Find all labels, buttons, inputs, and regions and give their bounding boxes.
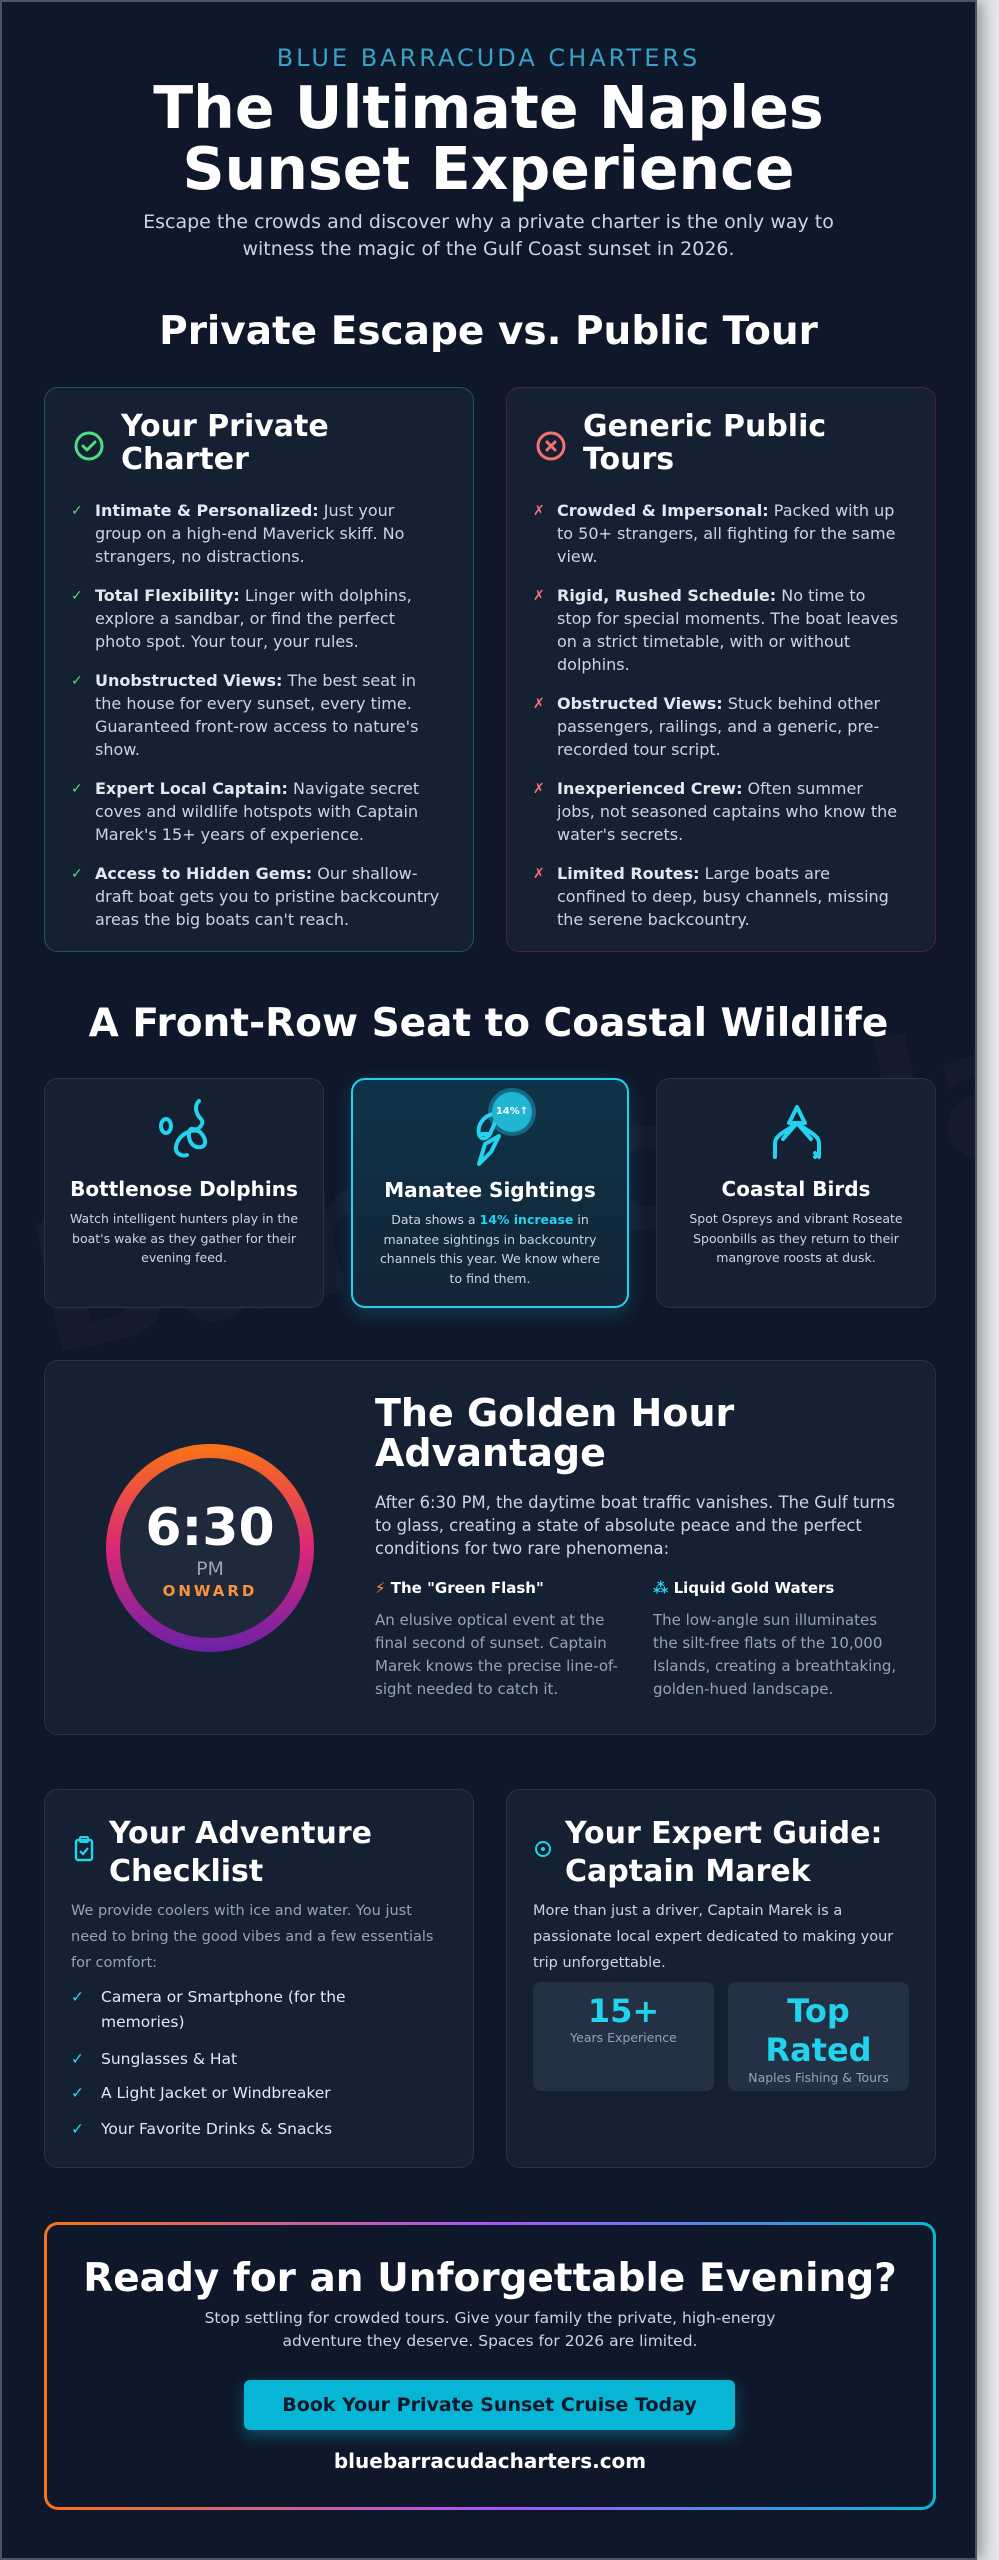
list: Your Favorite Drinks & Snacks bbox=[101, 2120, 332, 2138]
panel: checklist bbox=[44, 1789, 474, 2168]
phenomenon: liquid gold: ⁂ Liquid Gold Waters bbox=[653, 1579, 834, 1597]
heading: Your Adventure bbox=[109, 1816, 372, 1851]
list: ✓ bbox=[71, 2120, 84, 2138]
list bbox=[71, 501, 439, 929]
icon: bird bbox=[773, 1105, 822, 1160]
stat: years bbox=[533, 1982, 714, 2091]
heading: Captain Marek bbox=[565, 1854, 811, 1889]
title bbox=[153, 74, 824, 203]
button: Book Your Private Sunset Cruise Today bbox=[282, 2394, 697, 2416]
CTA text: Stop settling for crowded tours. Give your family the private, high-energy bbox=[205, 2309, 775, 2327]
heading: wildlife: A Front-Row Seat to Coastal Wildlife bbox=[89, 1001, 888, 1046]
subtitle: witness the magic of the Gulf Coast sunset in 2026. bbox=[242, 238, 735, 260]
list: Total Flexibility: Linger with dolphins, explore a sandbar, or find the perfect photo spot. Your tour, your rules. bbox=[95, 586, 412, 651]
icon: compass bbox=[535, 1841, 551, 1857]
heading bbox=[564, 1816, 883, 1889]
clock ring bbox=[106, 1444, 314, 1652]
stat: top rated bbox=[728, 1982, 909, 2091]
list: ✓ bbox=[71, 2084, 84, 2102]
list: ✓ bbox=[71, 588, 83, 604]
icon: x circle bbox=[536, 432, 566, 460]
list: Inexperienced Crew: Often summer jobs, not seasoned captains who know the water's secrets. bbox=[557, 779, 897, 844]
list: ✓ bbox=[71, 2050, 84, 2068]
stat: top rated: Top bbox=[787, 1992, 850, 2030]
card: dolphins: Watch intelligent hunters play in the boat's wake as they gather for their evening feed. bbox=[70, 1211, 298, 1265]
list: ✗ bbox=[533, 588, 545, 604]
card: dolphins bbox=[44, 1078, 324, 1308]
list: ✗ bbox=[533, 696, 545, 712]
CTA heading: Ready for an Unforgettable Evening? bbox=[83, 2256, 897, 2301]
list bbox=[533, 501, 898, 929]
heading: Advantage bbox=[375, 1431, 606, 1475]
badge: 14%: 14%↑ bbox=[496, 1106, 528, 1117]
panel: private charter bbox=[44, 387, 474, 952]
panel: public tours bbox=[506, 387, 936, 952]
heading: Generic Public bbox=[583, 409, 826, 444]
stat: top rated: Naples Fishing & Tours bbox=[748, 2070, 889, 2085]
list: Camera or Smartphone (for the memories) bbox=[101, 1988, 346, 2031]
list bbox=[71, 1988, 346, 2138]
icon: dolphin bbox=[159, 1098, 208, 1158]
list: ✓ bbox=[71, 503, 83, 519]
list: ✓ bbox=[71, 673, 83, 689]
CTA text: adventure they deserve. Spaces for 2026 are limited. bbox=[283, 2332, 697, 2350]
panel: wildlife cards bbox=[44, 1076, 936, 1322]
icon: check circle bbox=[74, 432, 104, 460]
list: Crowded & Impersonal: Packed with up to 50+ strangers, all fighting for the same view. bbox=[557, 501, 895, 566]
list: Access to Hidden Gems: Our shallow-draft boat gets you to pristine backcountry areas the big boats can't reach. bbox=[95, 864, 439, 929]
subtitle bbox=[143, 211, 834, 260]
button bbox=[244, 2380, 735, 2430]
heading: Checklist bbox=[109, 1854, 263, 1889]
card: manatee (highlighted): Manatee Sightings bbox=[384, 1178, 596, 1202]
heading: The Golden Hour bbox=[375, 1391, 734, 1435]
list: Limited Routes: Large boats are confined to deep, busy channels, missing the serene backcountry. bbox=[557, 864, 889, 929]
card: birds: Spot Ospreys and vibrant Roseate Spoonbills as they return to their mangrove roosts at dusk. bbox=[689, 1211, 903, 1265]
list: Expert Local Captain: Navigate secret coves and wildlife hotspots with Captain Marek's 15+ years of experience. bbox=[95, 779, 419, 844]
list: A Light Jacket or Windbreaker bbox=[101, 2084, 331, 2102]
intro: We provide coolers with ice and water. You just need to bring the good vibes and a few essentials for comfort: bbox=[71, 1903, 433, 1971]
intro: More than just a driver, Captain Marek is a passionate local expert dedicated to making your trip unforgettable. bbox=[533, 1903, 893, 1971]
title: Sunset Experience bbox=[182, 135, 795, 203]
stat: top rated: Rated bbox=[765, 2031, 872, 2069]
card: dolphins: Bottlenose Dolphins bbox=[70, 1177, 298, 1201]
subtitle: Escape the crowds and discover why a private charter is the only way to bbox=[143, 211, 834, 233]
list: ✓ bbox=[71, 866, 83, 882]
icon: manatee bbox=[476, 1112, 502, 1166]
title: The Ultimate Naples bbox=[153, 74, 824, 142]
list: Sunglasses & Hat bbox=[101, 2050, 237, 2068]
clock ring: 6:30 bbox=[145, 1498, 275, 1558]
brand label: BLUE BARRACUDA CHARTERS bbox=[277, 44, 700, 72]
icon: clipboard bbox=[74, 1836, 94, 1862]
card: birds: Coastal Birds bbox=[722, 1177, 870, 1201]
card: birds bbox=[656, 1078, 936, 1308]
phenomenon: liquid gold: The low-angle sun illuminates the silt-free flats of the 10,000 Islands, creating a breathtaking, golden-hued landscape. bbox=[653, 1611, 896, 1698]
list: ✗ bbox=[533, 866, 545, 882]
url: bluebarracudacharters.com bbox=[334, 2449, 646, 2473]
heading bbox=[108, 1816, 372, 1889]
list: ✓ bbox=[71, 1988, 84, 2006]
list: Rigid, Rushed Schedule: No time to stop for special moments. The boat leaves on a strict timetable, with or without dolphins. bbox=[557, 586, 898, 674]
heading: comparison: Private Escape vs. Public Tour bbox=[159, 309, 818, 354]
stat: years: Years Experience bbox=[570, 2030, 677, 2045]
CTA text bbox=[205, 2309, 775, 2350]
heading: Charter bbox=[121, 442, 249, 477]
heading bbox=[375, 1391, 734, 1475]
heading: Your Expert Guide: bbox=[565, 1816, 883, 1851]
list: Intimate & Personalized: Just your group on a high-end Maverick skiff. No strangers, no distractions. bbox=[95, 501, 404, 566]
panel: golden hour bbox=[44, 1360, 936, 1735]
CTA panel bbox=[44, 2222, 936, 2510]
heading: Your Private bbox=[121, 409, 329, 444]
panel: captain bbox=[506, 1789, 936, 2168]
phenomenon: green flash: An elusive optical event at the final second of sunset. Captain Marek knows the precise line-of-sight needed to catch it. bbox=[375, 1611, 618, 1698]
text: After 6:30 PM, the daytime boat traffic vanishes. The Gulf turns to glass, creating a state of absolute peace and the perfect conditions for two rare phenomena: bbox=[375, 1493, 895, 1558]
phenomenon: green flash: ⚡ The "Green Flash" bbox=[375, 1579, 544, 1597]
list: ✗ bbox=[533, 781, 545, 797]
list: Obstructed Views: Stuck behind other passengers, railings, and a generic, pre-recorded tour script. bbox=[557, 694, 880, 759]
card: manatee (highlighted) bbox=[351, 1078, 629, 1308]
heading: Tours bbox=[583, 442, 674, 477]
clock ring: PM bbox=[196, 1558, 224, 1580]
list: ✓ bbox=[71, 781, 83, 797]
stat: years: 15+ bbox=[588, 1992, 659, 2030]
badge: 14% bbox=[492, 1092, 532, 1132]
clock ring: ONWARD bbox=[163, 1582, 257, 1600]
card: manatee (highlighted): Data shows a 14% increase in manatee sightings in backcountry channels this year. We know where to find them. bbox=[380, 1212, 600, 1286]
list: Unobstructed Views: The best seat in the house for every sunset, every time. Guaranteed front-row access to nature's show. bbox=[95, 671, 418, 759]
heading bbox=[120, 409, 329, 477]
heading bbox=[583, 409, 826, 477]
list: ✗ bbox=[533, 503, 545, 519]
